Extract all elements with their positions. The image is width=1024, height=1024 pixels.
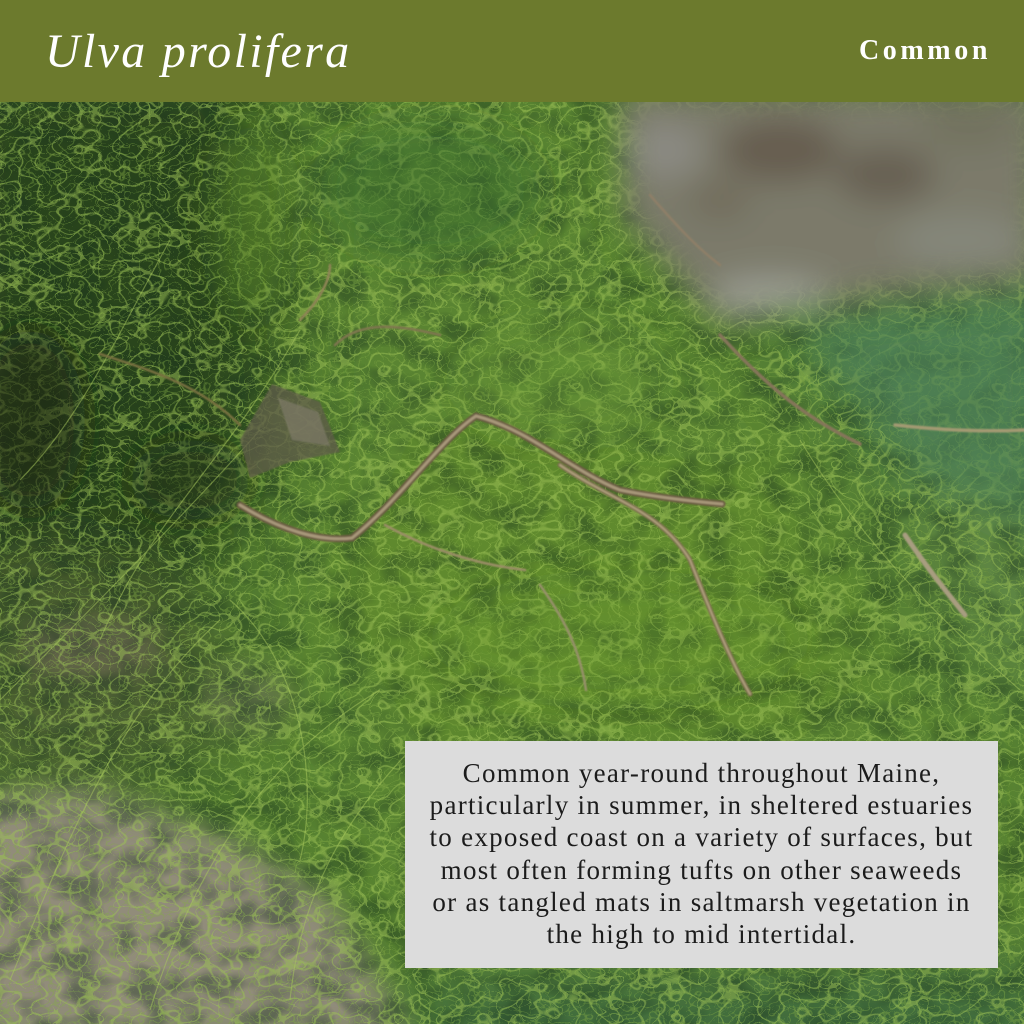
description text: particularly in summer, in sheltered estuaries bbox=[430, 790, 973, 820]
description text: or as tangled mats in saltmarsh vegetation in bbox=[432, 887, 971, 917]
description panel bbox=[405, 741, 998, 968]
loose algae strands bbox=[0, 240, 1020, 1010]
status label: Common bbox=[859, 35, 991, 66]
description text bbox=[430, 758, 973, 949]
header bar bbox=[0, 0, 1024, 102]
description text: to exposed coast on a variety of surfaces, but bbox=[430, 822, 973, 852]
title: Ulva prolifera bbox=[45, 25, 351, 78]
lit and shaded patches over the algae bbox=[0, 120, 800, 700]
description text: the high to mid intertidal. bbox=[547, 919, 856, 949]
description text: Common year-round throughout Maine, bbox=[463, 758, 940, 788]
description text: most often forming tufts on other seaweeds bbox=[441, 855, 962, 885]
out-of-focus background at upper right bbox=[620, 90, 1024, 530]
mud showing through at lower left bbox=[0, 620, 410, 1024]
dried grass blade bbox=[100, 195, 1024, 694]
debris clump bbox=[240, 384, 340, 478]
